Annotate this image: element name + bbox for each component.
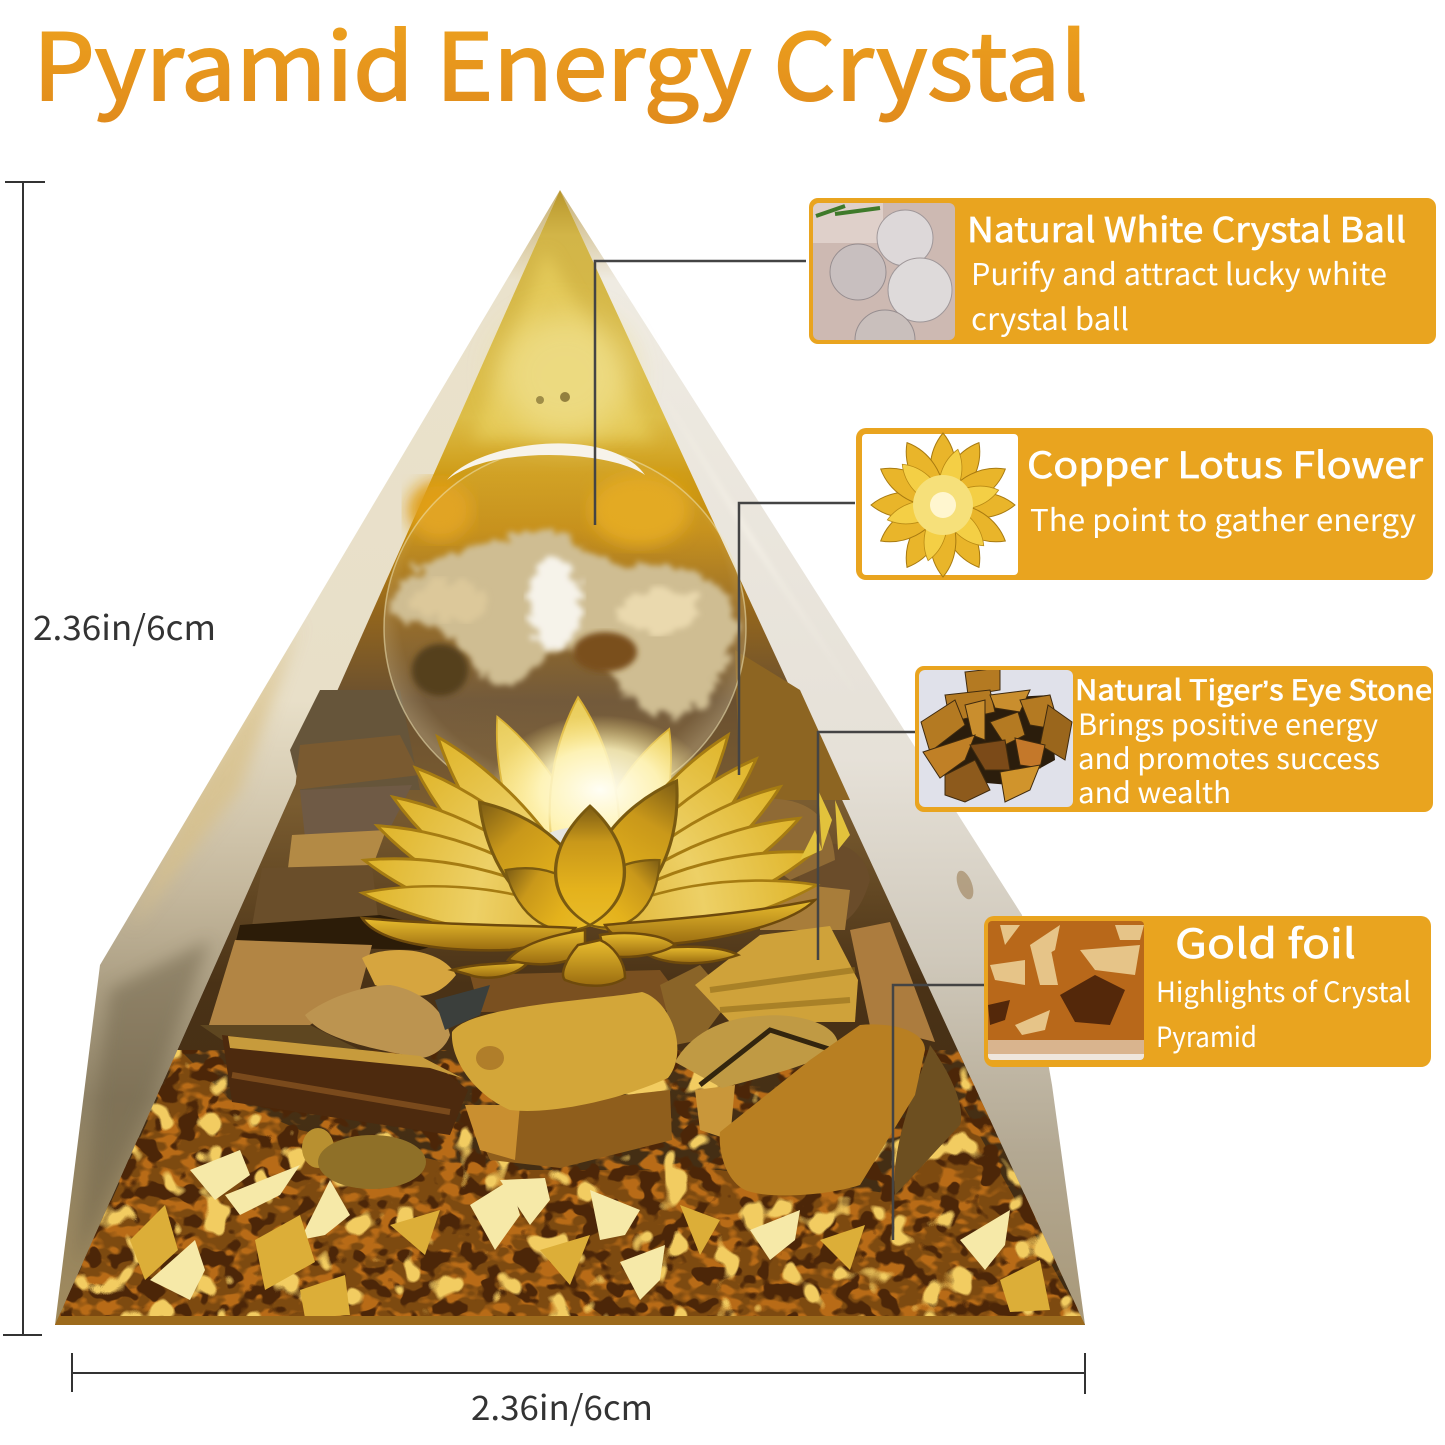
description: Purify and attract lucky white: [971, 250, 1387, 294]
gold foil base: [55, 1050, 1085, 1330]
front petals: [456, 765, 704, 946]
white arc: [447, 443, 645, 480]
description: The point to gather energy: [1030, 496, 1416, 540]
icon: lotus top view: [871, 433, 1015, 577]
pyramid photo: [55, 190, 1085, 1330]
icon: tiger eye stones photo: [919, 668, 1073, 807]
description: Pyramid: [1156, 1016, 1257, 1056]
heading: Natural White Crystal Ball: [967, 203, 1406, 252]
copper lotus flower: [358, 696, 821, 986]
description: and wealth: [1078, 770, 1231, 812]
heading: Gold foil: [1175, 912, 1356, 970]
low petals: [362, 900, 815, 986]
icon: gold foil photo: [988, 921, 1144, 1060]
translucent upper petals: [470, 696, 697, 937]
height dimension: [3, 182, 216, 1335]
heading: Copper Lotus Flower: [1027, 437, 1424, 489]
right side face: [560, 190, 1085, 1325]
width dimension: 2.36in/6cm: [471, 1381, 653, 1430]
tiger eye stones: [55, 785, 1085, 1330]
description: Highlights of Crystal: [1156, 971, 1411, 1011]
icon: crystal balls photo: [813, 203, 955, 340]
leader lines: [595, 261, 984, 1240]
description: Brings positive energy: [1078, 702, 1378, 744]
panel: tiger eye stone: [915, 666, 1433, 812]
crystal disc: [532, 826, 648, 874]
crystal ball: [384, 443, 746, 809]
white wisps: [390, 530, 740, 716]
panel: white crystal ball: [809, 198, 1436, 344]
description: and promotes success: [1078, 736, 1380, 778]
panel: copper lotus flower: [856, 428, 1433, 580]
left side face: [55, 190, 560, 1325]
heading: Natural Tiger ’s Eye Stone: [1075, 669, 1432, 709]
height dimension: 2.36in/6cm: [33, 601, 216, 650]
width dimension: [72, 1353, 1085, 1430]
back petals: [358, 721, 821, 948]
inner cavity: [55, 190, 1085, 1325]
gold shards at right edge: [800, 790, 850, 860]
panel: gold foil: [984, 912, 1431, 1067]
description: crystal ball: [971, 295, 1129, 339]
